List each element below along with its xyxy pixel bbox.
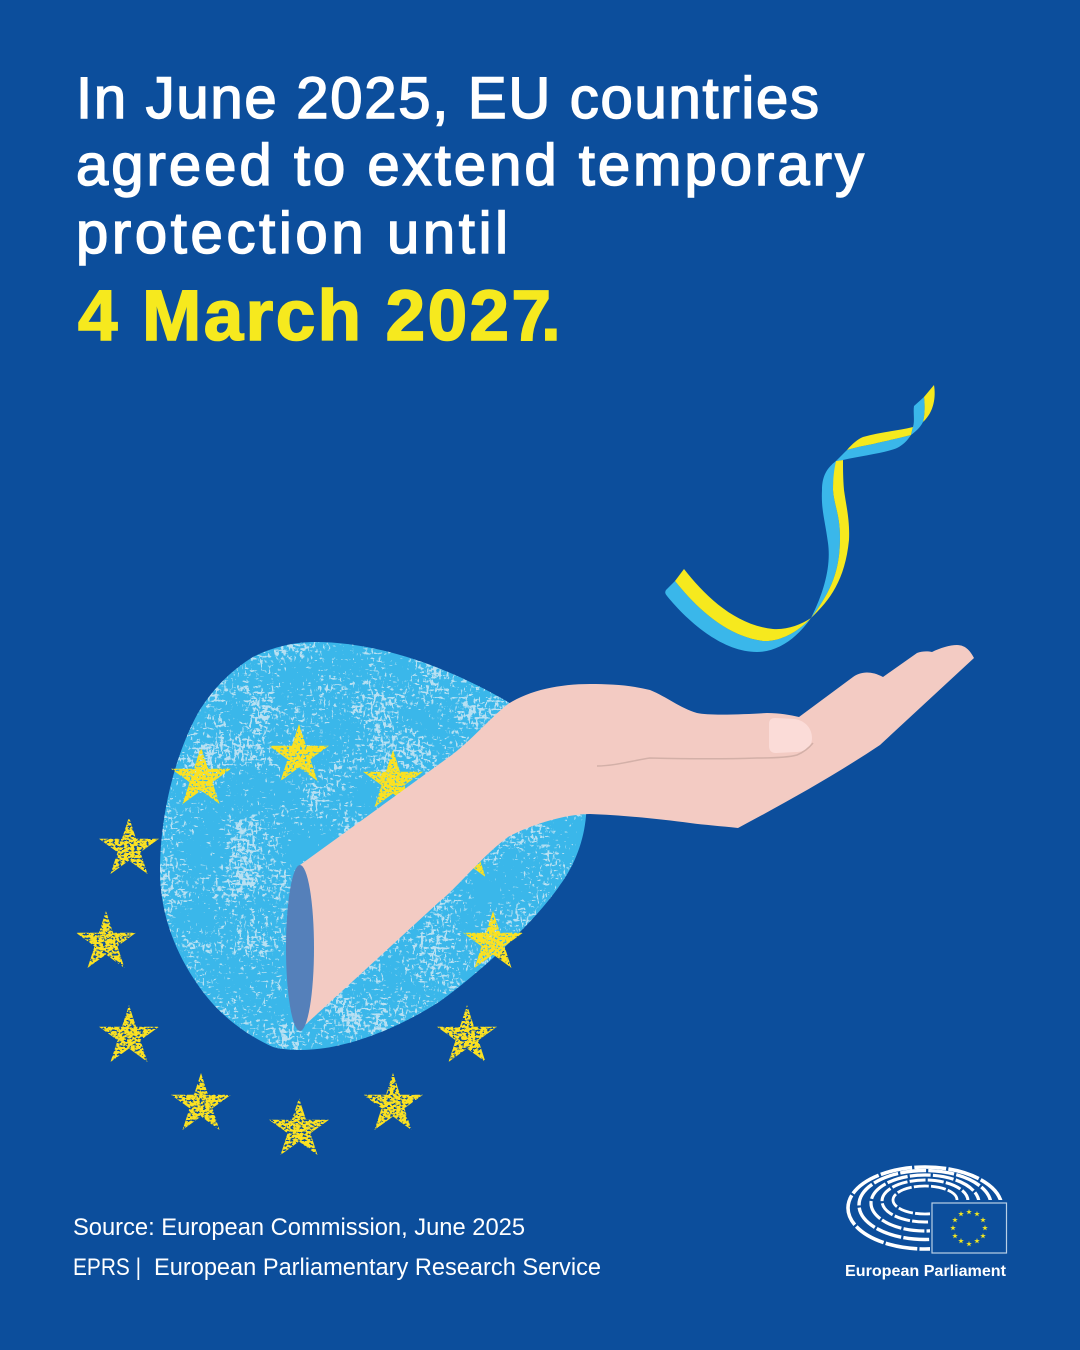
- title: [76, 66, 864, 266]
- ribbon: lower blue band: [665, 581, 811, 652]
- ribbon: lower yellow band: [675, 569, 811, 641]
- hand: [286, 645, 974, 1031]
- source text: [73, 1214, 601, 1281]
- logo: flag: [932, 1203, 1006, 1253]
- highlighted date: 4 March 2027: [78, 277, 551, 356]
- ribbon: twisted tip: [911, 397, 925, 435]
- source text: EPRS |: [73, 1254, 141, 1281]
- title: protection until: [76, 201, 508, 266]
- logo: hemicycle: [848, 1167, 1002, 1249]
- ribbon: tip yellow: [923, 385, 935, 422]
- source text: European Parliamentary Research Service: [154, 1254, 601, 1281]
- source text: Source: European Commission, June 2025: [73, 1214, 525, 1241]
- title: agreed to extend temporary: [76, 133, 864, 198]
- ribbon: middle yellow band: [811, 460, 849, 618]
- hand: arm and palm: [300, 645, 974, 1030]
- hand: thumb crease: [597, 743, 813, 766]
- title: In June 2025, EU countries: [76, 66, 819, 131]
- hand: thumb nail: [769, 718, 812, 753]
- ribbon: middle blue band: [811, 460, 843, 618]
- logo: flag stars: [950, 1209, 988, 1246]
- infographic canvas: [74, 74, 1008, 1280]
- ribbon: [665, 385, 935, 652]
- ribbon: upper blue band: [836, 435, 911, 461]
- European Parliament logo: [845, 1167, 1006, 1280]
- EU stars on the background: [76, 817, 497, 1155]
- highlighted date: .: [541, 277, 561, 356]
- textured blue blob: [160, 642, 586, 1050]
- ribbon: upper yellow band: [847, 427, 913, 450]
- logo: wordmark: European Parliament: [845, 1263, 1006, 1280]
- EU stars over the blob: [171, 724, 523, 968]
- hand: sleeve opening: [286, 865, 314, 1031]
